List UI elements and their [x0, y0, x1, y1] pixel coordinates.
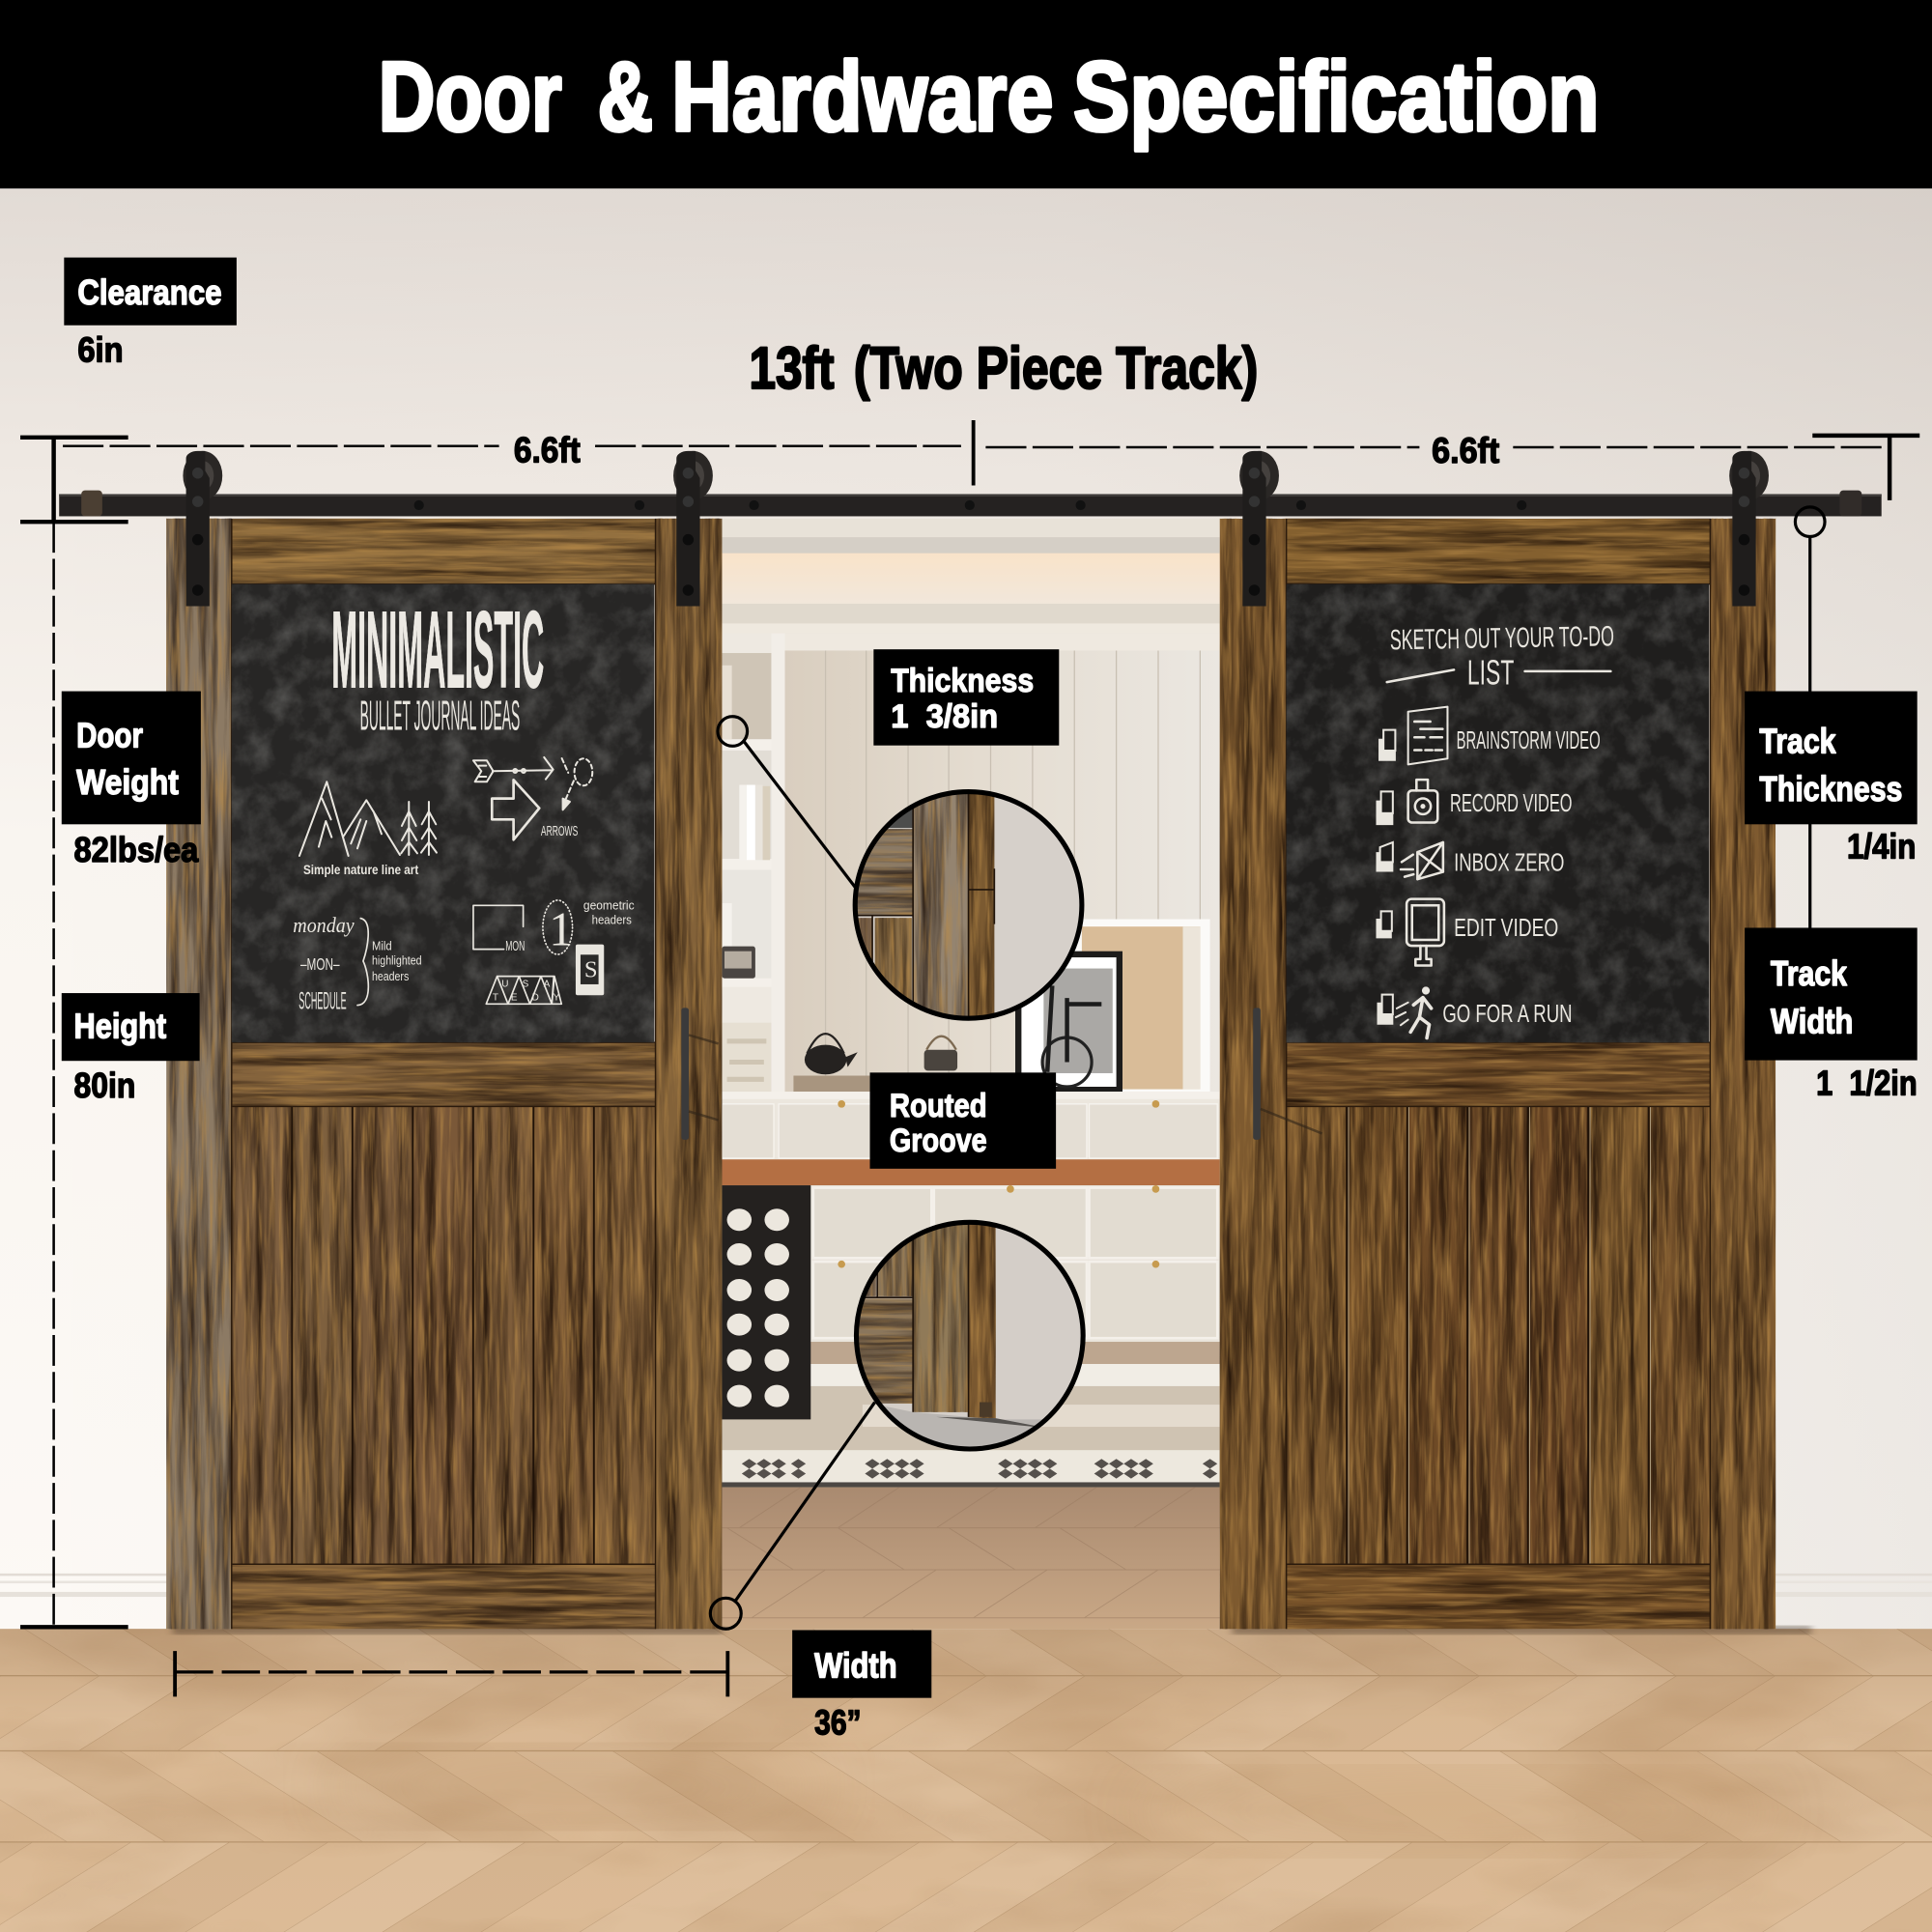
chalk geometric headers: headers	[592, 914, 632, 927]
item run	[1378, 986, 1573, 1037]
dimension: two piece track heading	[750, 335, 1258, 401]
chalk list word: LIST	[1467, 654, 1514, 693]
door pull handles	[681, 1008, 1322, 1140]
value: height: 80in	[74, 1066, 135, 1105]
title bar	[0, 0, 1932, 188]
item run: GO FOR A RUN	[1442, 1001, 1573, 1028]
label: height: Height	[74, 1008, 166, 1046]
label: width: Width	[814, 1647, 897, 1686]
paneled wall	[784, 650, 1220, 1096]
value: track width: 1 1/2in	[1816, 1064, 1918, 1102]
value: track thickness: 1/4in	[1847, 827, 1916, 866]
panel: left barn door	[166, 519, 722, 1629]
wooden counter	[722, 1159, 1220, 1185]
item brainstorm	[1378, 707, 1601, 764]
herringbone floor	[0, 1629, 1932, 1932]
chalk geometric headers: T	[493, 992, 498, 1003]
value: clearance: 6in	[77, 330, 124, 369]
lower cabinets	[810, 1185, 1220, 1342]
room floor and rug	[722, 1342, 1220, 1629]
value: width: 36”	[814, 1703, 862, 1742]
dimension: 6.6ft right span: 6.6ft	[1432, 431, 1499, 470]
label: clearance: Clearance	[77, 273, 222, 312]
label: height	[62, 993, 200, 1061]
chalk geometric headers: S	[523, 980, 529, 990]
label: door weight: Weight	[76, 763, 179, 802]
framed art	[1015, 920, 1210, 1093]
chalk caption arrows: ARROWS	[541, 824, 578, 839]
label: routed groove: Groove	[890, 1122, 987, 1159]
dimension: door height line	[20, 522, 128, 1627]
chalk list word	[1387, 654, 1610, 693]
item inbox: INBOX ZERO	[1454, 850, 1564, 877]
label: width	[792, 1631, 931, 1698]
callout: thickness magnifier	[850, 788, 1092, 1023]
chalk schedule headers: highlighted	[372, 952, 422, 967]
label: door weight	[62, 692, 201, 824]
chalk schedule headers: Mild	[372, 938, 392, 952]
sliding track rail	[59, 491, 1882, 516]
title bar: &	[598, 42, 653, 152]
chalk geometric headers: MON	[505, 939, 525, 954]
chalk geometric headers: Y	[554, 992, 560, 1003]
lower planks right door	[1287, 519, 1710, 1629]
chalk schedule headers: SCHEDULE	[298, 988, 347, 1014]
label: track thickness: Thickness	[1759, 770, 1902, 809]
chalk geometric headers: E	[511, 992, 518, 1003]
chalk schedule headers: monday	[293, 913, 355, 937]
panel: left barn door: MINIMALISTIC	[331, 589, 544, 712]
label: door weight: Door	[76, 717, 143, 755]
kettles and tray	[793, 1034, 957, 1094]
callout: routed groove magnifier	[850, 1220, 1092, 1454]
item record	[1376, 780, 1573, 825]
title bar: Hardware	[671, 42, 1054, 152]
chalk geometric headers: S	[584, 957, 598, 983]
title bar: Specification	[1073, 42, 1600, 152]
chalkboard left	[232, 584, 654, 1042]
lower planks left door	[232, 519, 656, 1629]
interior room seen through opening	[722, 519, 1220, 1629]
dimension: centre tick	[972, 420, 975, 486]
chalk caption nature: Simple nature line art	[303, 862, 419, 877]
chalk mountains	[299, 781, 437, 856]
dimension: top right bracket	[1812, 436, 1919, 500]
callout: thickness connector	[718, 717, 855, 887]
label: routed groove: Routed	[890, 1088, 987, 1124]
chalk schedule headers: headers	[372, 969, 410, 983]
label: routed groove	[870, 1072, 1056, 1169]
door floor shadows	[173, 1627, 1811, 1634]
chalk geometric headers: D	[532, 992, 539, 1003]
label: thickness: Thickness	[891, 663, 1034, 699]
item edit	[1376, 899, 1558, 965]
label: track thickness: Track	[1759, 722, 1836, 760]
dimension: door width	[175, 1651, 727, 1696]
chalkboard right	[1287, 584, 1709, 1042]
title bar: Door	[379, 42, 562, 152]
perforated black panel	[722, 1185, 810, 1419]
value: door weight: 82lbs/ea	[74, 831, 199, 869]
dimension: top left clearance bracket	[20, 438, 128, 522]
panel: right barn door	[1220, 519, 1776, 1629]
wall background	[0, 188, 1932, 1630]
chalkboard left: BULLET JOURNAL IDEAS	[360, 694, 520, 740]
label: thickness	[873, 649, 1059, 746]
label: track thickness	[1745, 692, 1918, 824]
item edit: EDIT VIDEO	[1454, 915, 1558, 942]
item inbox	[1376, 842, 1564, 879]
label: track width	[1745, 927, 1918, 1061]
label: clearance	[64, 258, 237, 326]
chalk geometric headers: geometric	[583, 899, 635, 913]
label: track width: Width	[1771, 1003, 1853, 1041]
dimension: 6.6ft left span: 6.6ft	[514, 430, 581, 469]
door hangers	[183, 451, 1769, 607]
dimension: two piece track heading: 13ft	[750, 335, 835, 401]
bookshelf	[722, 634, 784, 1096]
dimension: two piece track heading: (Two Piece Track)	[854, 335, 1258, 401]
chalk geometric headers: A	[544, 980, 551, 990]
callout: groove connector	[710, 1403, 875, 1629]
label: thickness: 1 3/8in	[891, 698, 998, 735]
chalk schedule headers: –MON–	[300, 954, 340, 974]
chalk title: SKETCH OUT YOUR TO-DO	[1390, 620, 1614, 656]
chalk arrows	[473, 757, 592, 839]
chalk geometric headers	[473, 899, 635, 1004]
upper cabinets	[722, 1092, 1220, 1159]
label: track width: Track	[1771, 954, 1847, 993]
chalk geometric headers: 1	[549, 901, 573, 955]
item record: RECORD VIDEO	[1450, 790, 1573, 817]
callout: track dimension connector	[1795, 507, 1825, 927]
item brainstorm: BRAINSTORM VIDEO	[1457, 727, 1601, 754]
chalk geometric headers: U	[501, 980, 508, 990]
chalk schedule headers	[293, 913, 422, 1014]
